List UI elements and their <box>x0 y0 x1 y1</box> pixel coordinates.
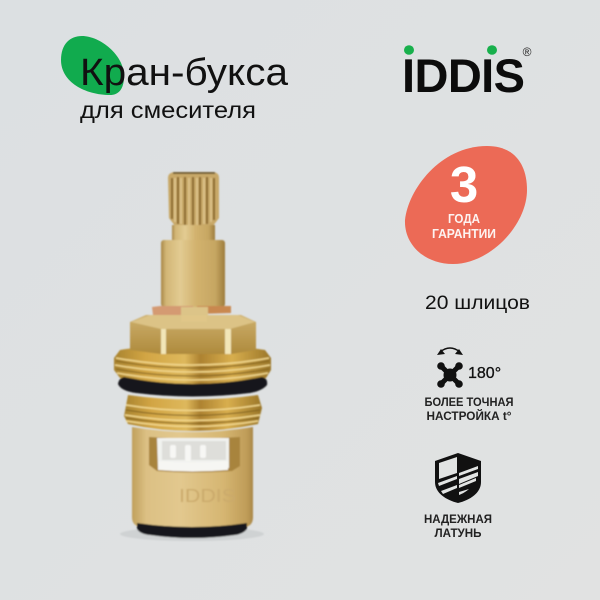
stem neck <box>172 225 215 242</box>
splined stem <box>168 172 219 226</box>
caption line 2: ЛАТУНЬ <box>434 526 482 540</box>
subtitle: для смесителя <box>80 97 256 123</box>
icon: arc arrowhead left <box>437 349 445 355</box>
icon: cross handle <box>437 362 463 388</box>
caption line 2: НАСТРОЙКА t° <box>426 408 512 423</box>
copper washer <box>152 306 231 321</box>
black o-ring <box>118 377 267 396</box>
number 3: 3 <box>450 156 478 213</box>
feature: reliable brass <box>424 453 492 540</box>
badge blob <box>405 146 527 264</box>
logo wordmark: IDDIS <box>402 49 525 102</box>
product photo: brass tap cartridge <box>114 172 271 541</box>
feature: 180 degree adjustment <box>424 348 514 423</box>
stem collar <box>161 240 225 307</box>
warranty label 2: ГАРАНТИИ <box>432 227 496 241</box>
logo dot left <box>404 45 414 55</box>
cartridge body <box>132 427 253 530</box>
caption line 1: БОЛЕЕ ТОЧНАЯ <box>424 395 514 409</box>
hex nut <box>130 315 256 354</box>
floor shadow <box>120 527 264 541</box>
icon: shield <box>435 453 481 503</box>
warranty label: ГОДА <box>448 212 480 226</box>
registered mark: ® <box>523 45 532 59</box>
lower thread <box>124 395 262 431</box>
icon: arc arrowhead right <box>455 349 463 355</box>
title: Кран-букса <box>80 52 289 94</box>
feature: splines count: 20 шлицов <box>425 293 530 314</box>
black base seal <box>137 523 247 538</box>
engraved body logo: IDDIS <box>179 486 236 506</box>
icon: green blob behind title <box>61 36 124 95</box>
icon: rotation arc <box>440 348 460 352</box>
warranty badge <box>405 146 527 264</box>
threaded flange <box>114 344 271 385</box>
logo dot right <box>487 45 497 55</box>
caption line 1: НАДЕЖНАЯ <box>424 512 492 526</box>
body window <box>149 437 240 472</box>
logo: IDDIS <box>402 45 532 102</box>
rotation label: 180° <box>468 365 501 382</box>
